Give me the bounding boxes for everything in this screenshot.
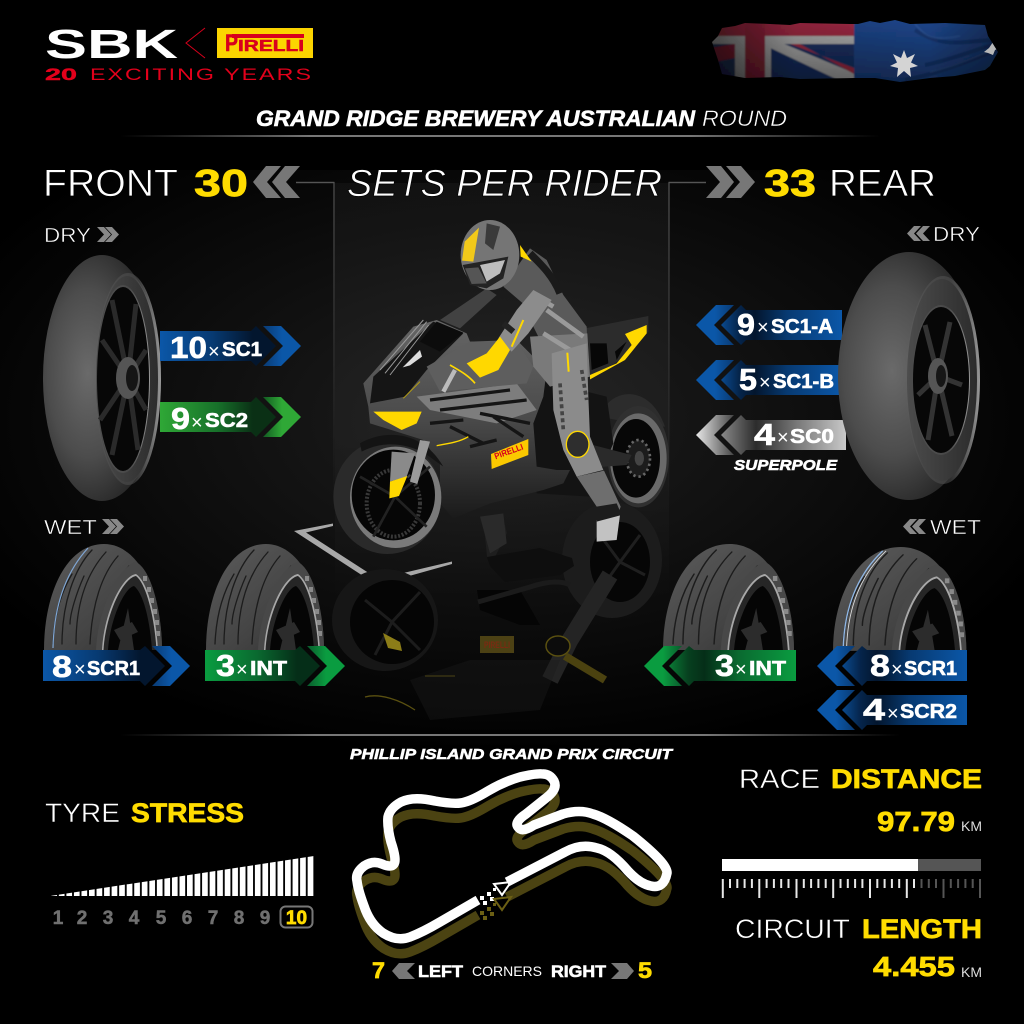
far arm: [440, 288, 497, 328]
rear wheel: [600, 394, 669, 507]
Pirelli badge: [217, 28, 313, 58]
wet tyre: rear SCR1: [833, 547, 966, 651]
stress scale numbers: 4: [129, 908, 140, 929]
tail: [585, 316, 648, 380]
badge: rear wet 8 x SCR1: 8: [870, 648, 890, 683]
track outline: [357, 774, 667, 939]
knee slider: [566, 431, 589, 457]
label: rear wet: WET: [930, 517, 981, 539]
Pirelli sticker: [491, 439, 528, 469]
badge: rear dry 4 x SC0 superpole: 4: [754, 417, 776, 452]
corners legend: LEFT: [418, 962, 464, 981]
stress scale numbers: 8: [234, 908, 244, 929]
SBK wordmark: SBK: [45, 21, 179, 67]
boot: [597, 515, 620, 542]
chin splitter: [373, 412, 422, 430]
floor plate: [294, 524, 452, 585]
badge: rear dry 5 x SC1-B: 5: [739, 362, 757, 397]
badge: rear wet 8 x SCR1: SCR1: [904, 658, 957, 680]
lower leg: [577, 471, 621, 518]
badge: rear dry 5 x SC1-B: SC1-B: [773, 371, 834, 393]
circuit name: PHILLIP ISLAND GRAND PRIX CIRCUIT: [350, 746, 674, 763]
corners legend: [372, 958, 652, 983]
race distance: RACE: [739, 764, 820, 794]
race distance: [739, 764, 982, 837]
leg: [552, 343, 603, 477]
circuit length: KM: [961, 964, 982, 980]
heading: rear sets: [706, 163, 936, 205]
badge: front wet 8 x SCR1: ×: [74, 659, 86, 681]
corners legend: 5: [638, 958, 652, 983]
heading: front sets: [43, 163, 300, 205]
stress scale numbers: 3: [103, 908, 113, 929]
motorcycle and rider: [333, 220, 669, 554]
hip: [530, 333, 590, 387]
Australian flag: [712, 20, 998, 82]
engine: [527, 377, 613, 497]
tyre stress: [45, 798, 314, 929]
badge: rear dry 4 x SC0 superpole: ×: [777, 427, 789, 449]
badge: front dry 10 x SC1: SC1: [222, 339, 262, 361]
heading: sets per rider: SETS PER RIDER: [347, 163, 662, 205]
logo: SBK and Pirelli: [45, 21, 313, 84]
badge: rear dry 9 x SC1-A: [696, 305, 842, 345]
badge: rear dry 9 x SC1-A: ×: [757, 317, 769, 339]
fairing: [363, 320, 570, 518]
race distance: KM: [961, 818, 982, 834]
badge: rear wet 8 x SCR1: ×: [891, 659, 903, 681]
stand leg: [480, 513, 507, 553]
stress scale numbers: [53, 906, 312, 929]
stress scale numbers: 1: [53, 908, 64, 929]
badge: front dry 10 x SC1: [160, 326, 301, 366]
heading: front sets: FRONT: [43, 163, 178, 205]
circuit map: [357, 774, 667, 954]
label: rear dry: [907, 224, 980, 246]
badge: rear wet 4 x SCR2: SCR2: [900, 701, 957, 723]
handlebar yellow: [450, 365, 475, 383]
anniversary tagline: 20: [45, 65, 77, 84]
badge: front wet 3 x INT: 3: [216, 648, 235, 683]
badge: front dry 10 x SC1: 10: [170, 330, 207, 365]
front dry tyre: [43, 255, 161, 501]
start line markers: [480, 882, 511, 920]
circuit length: LENGTH: [862, 914, 982, 944]
badge: rear dry 5 x SC1-B: ×: [759, 372, 771, 394]
stress scale numbers: 5: [156, 908, 167, 929]
wet tyre: rear INT: [663, 544, 794, 650]
corners legend: CORNERS: [472, 963, 542, 979]
badge: front wet 3 x INT: INT: [250, 658, 287, 680]
wet tyre: front SCR1: [44, 544, 162, 650]
badge: front dry 9 x SC2: 9: [171, 401, 190, 436]
badge: front wet 8 x SCR1: SCR1: [87, 658, 140, 680]
heading: front sets: 30: [194, 163, 248, 205]
circuit length: CIRCUIT: [735, 914, 850, 944]
rear dry tyre: [838, 252, 980, 500]
fairing graphics: [380, 320, 537, 447]
label: rear wet: [903, 517, 981, 539]
race distance: DISTANCE: [831, 764, 982, 794]
Pirelli sticker: PIRELLI: [493, 442, 525, 461]
label: front wet: WET: [44, 517, 97, 539]
stress scale numbers: 10: [286, 908, 307, 929]
centre panel: [335, 183, 669, 603]
badge: rear dry 9 x SC1-A: 9: [737, 307, 755, 342]
badge: rear wet 4 x SCR2: [817, 690, 967, 730]
bike reflection: [332, 502, 662, 720]
badge: rear dry 9 x SC1-A: SC1-A: [771, 316, 833, 338]
label: rear dry: DRY: [933, 224, 980, 246]
star: [890, 50, 918, 77]
central glow: [0, 80, 1024, 760]
tyre stress heading: TYRE: [45, 798, 120, 828]
suit highlights: [537, 297, 583, 350]
tyre stress heading: [45, 798, 244, 828]
near arm: [498, 290, 552, 352]
round title suffix: ROUND: [702, 106, 787, 131]
badge: rear wet 4 x SCR2: ×: [887, 703, 899, 725]
stress scale numbers: 7: [208, 908, 218, 929]
badge: front dry 9 x SC2: ×: [191, 412, 203, 434]
label: front wet: [44, 517, 124, 539]
badge: rear dry 4 x SC0 superpole: SUPERPOLE: [734, 457, 838, 474]
circuit length: 4.455: [873, 951, 955, 982]
stress scale numbers: 2: [77, 908, 87, 929]
badge: rear wet 8 x SCR1: [817, 646, 967, 686]
windscreen: [370, 322, 463, 403]
badge: rear wet 3 x INT: ×: [735, 659, 747, 681]
heading: rear sets: REAR: [829, 163, 936, 205]
Pirelli badge: P: [225, 30, 238, 57]
badge: rear dry 5 x SC1-B: [696, 360, 842, 400]
wet tyre: front INT: [206, 544, 324, 650]
label: front dry: DRY: [44, 225, 91, 247]
anniversary tagline: [45, 65, 313, 84]
badge: rear wet 4 x SCR2: 4: [863, 692, 886, 727]
distance progress bar: [722, 859, 981, 898]
helmet: [461, 220, 532, 290]
badge: front wet 3 x INT: ×: [236, 659, 248, 681]
tyre stress heading: STRESS: [131, 798, 244, 828]
badge: front wet 3 x INT: [205, 646, 345, 686]
stress scale numbers: 9: [260, 908, 270, 929]
glove: [467, 337, 510, 378]
stress scale numbers: 6: [182, 908, 192, 929]
badge: rear dry 4 x SC0 superpole: [696, 415, 846, 474]
label: front dry: [44, 225, 119, 247]
corners legend: RIGHT: [551, 962, 607, 981]
Pirelli badge: IRELLI: [238, 38, 304, 55]
badge: front dry 10 x SC1: ×: [208, 341, 220, 363]
swingarm: [583, 443, 632, 468]
bike reflection: PIRELLI: [484, 640, 510, 650]
anniversary tagline: EXCITING YEARS: [90, 65, 313, 84]
stress scale bars: [50, 856, 314, 896]
badge: front dry 9 x SC2: SC2: [205, 410, 248, 432]
badge: front wet 8 x SCR1: 8: [52, 649, 72, 684]
yellow fairing line: [437, 437, 468, 446]
circuit length: [735, 914, 982, 982]
badge: front dry 9 x SC2: [160, 397, 301, 437]
round title: GRAND RIDGE BREWERY AUSTRALIAN: [256, 106, 696, 131]
connector lines: [296, 182, 334, 500]
badge: rear dry 4 x SC0 superpole: SC0: [790, 426, 834, 448]
torso: [503, 248, 588, 370]
track shadow: [357, 789, 667, 954]
heading: rear sets: 33: [764, 163, 816, 205]
badge: rear wet 3 x INT: INT: [749, 658, 786, 680]
corners legend: 7: [372, 958, 385, 983]
badge: rear wet 3 x INT: 3: [715, 648, 734, 683]
badge: front wet 8 x SCR1: [43, 646, 190, 686]
badge: rear wet 3 x INT: [644, 646, 796, 686]
red chevron: [186, 28, 205, 58]
front wheel: [333, 435, 443, 554]
race distance: 97.79: [877, 806, 955, 837]
